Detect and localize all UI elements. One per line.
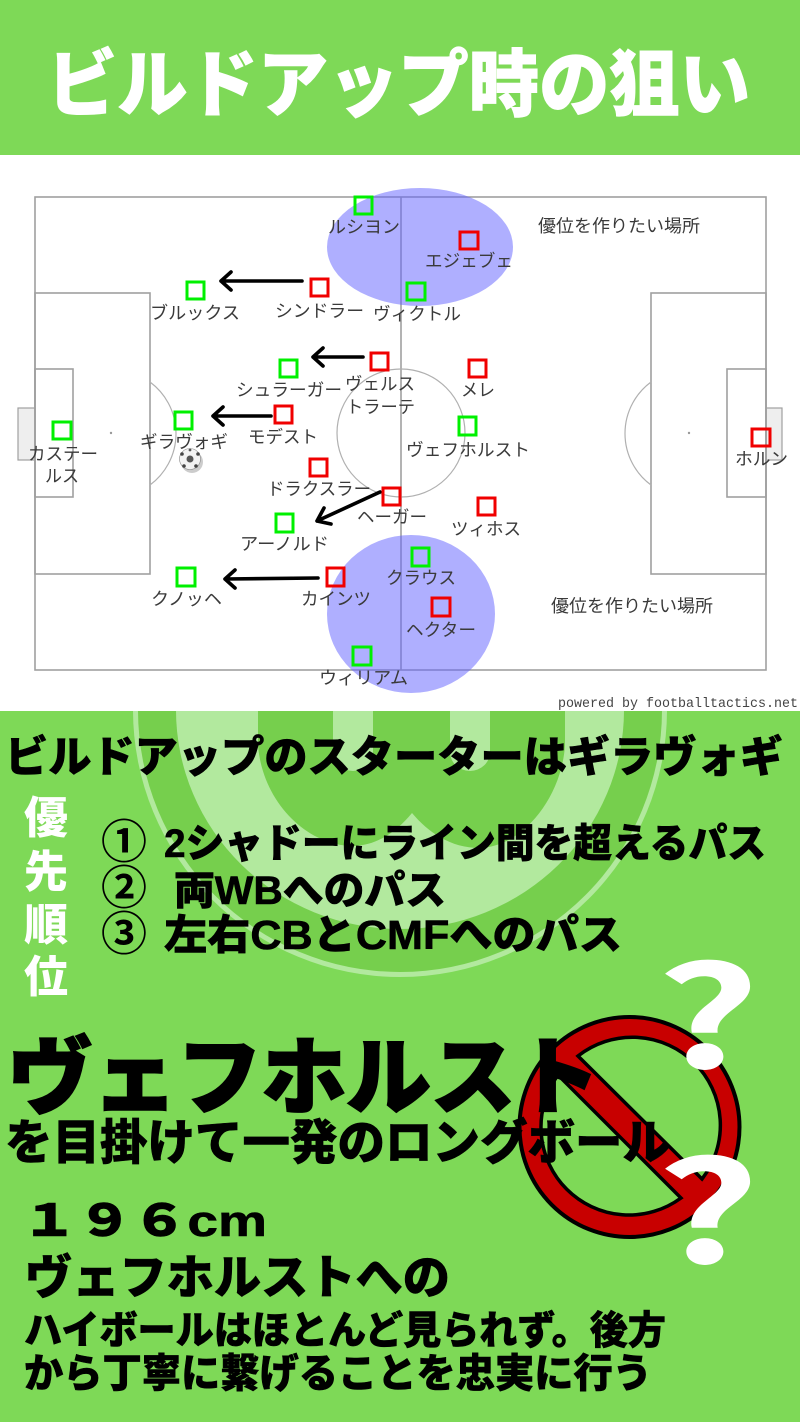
highlighted zone: top — [327, 188, 513, 306]
vertical label: priority: 先 — [24, 848, 68, 897]
arrow: シンドラー to ブルックス — [221, 272, 302, 290]
player: クラウス: クラウス — [386, 568, 456, 588]
priority list — [101, 816, 766, 960]
player: ヴェフホルスト — [406, 417, 530, 460]
player: ヴェルストラーテ: トラーテ — [346, 397, 415, 417]
player: エジェブェ: エジェブェ — [425, 251, 513, 271]
panel: lower section background — [0, 711, 800, 1422]
player: カステールス: ルス — [45, 466, 79, 486]
item 2: ② — [101, 862, 147, 914]
item 2 — [101, 862, 446, 914]
arrow: ヴェルストラーテ to シュラーガー — [313, 348, 363, 366]
question mark bottom: ? — [656, 1102, 760, 1304]
vertical label: priority: 順 — [24, 901, 68, 950]
player: ルシヨン: ルシヨン — [328, 217, 400, 237]
player: クノッヘ — [151, 568, 222, 609]
player: ツィホス: ツィホス — [451, 519, 521, 539]
player: アーノルド: アーノルド — [240, 534, 329, 554]
arrow: ヘーガー to アーノルド — [317, 492, 380, 524]
player: シンドラー: シンドラー — [275, 301, 364, 321]
highlighted zone: bottom — [327, 535, 495, 693]
player: ホルン: ホルン — [735, 449, 788, 469]
player: ホルン — [735, 429, 788, 469]
player: ツィホス — [451, 498, 521, 539]
item 1: 2シャドーにライン間を超えるパス — [164, 822, 766, 866]
player: ヘーガー: ヘーガー — [357, 507, 427, 527]
player: ヴェルストラーテ: ヴェルス — [345, 374, 415, 394]
title: ビルドアップ時の狙い — [47, 45, 750, 126]
vertical label: priority: 優 — [24, 794, 68, 843]
player: ブルックス — [150, 282, 240, 323]
item 3: 左右CBとCMFへのパス — [164, 912, 622, 958]
player: ヘクター — [406, 598, 476, 640]
player: シュラーガー — [236, 360, 342, 400]
player: ヘクター: ヘクター — [406, 620, 476, 640]
panel: tactical pitch diagram — [0, 155, 800, 712]
player: ドラクスラー — [267, 459, 371, 499]
pitch markings — [18, 197, 782, 670]
player: ウィリアム: ウィリアム — [319, 668, 408, 688]
player: クノッヘ: クノッヘ — [151, 589, 222, 609]
body line 1: ヴェフホルストへの — [25, 1251, 450, 1304]
vertical label: priority: 位 — [24, 953, 68, 1002]
player: アーノルド — [240, 514, 329, 554]
player: ギラヴォギ — [140, 412, 228, 452]
item 2: 両WBへのパス — [174, 869, 446, 913]
body line 3: から丁寧に繋げることを忠実に行う — [24, 1352, 652, 1396]
item 1: ① — [101, 816, 147, 868]
heading: ヴェフホルスト: ヴェフホルスト — [8, 1031, 600, 1125]
player: ヴィクトル — [373, 283, 461, 324]
player: カステールス — [28, 422, 98, 486]
player: メレ — [461, 360, 495, 400]
player: ヴィクトル: ヴィクトル — [373, 304, 461, 324]
zone label top: 優位を作りたい場所 — [538, 216, 700, 236]
player: メレ: メレ — [461, 380, 495, 400]
icon: prohibition sign — [520, 1017, 740, 1237]
player: ブルックス: ブルックス — [150, 303, 240, 323]
player: ヴェルストラーテ — [345, 353, 415, 417]
arrow: モデスト to ギラヴォギ — [213, 407, 271, 425]
player: カインツ: カインツ — [301, 589, 371, 609]
item 3: ③ — [101, 908, 147, 960]
player: ヘーガー — [357, 488, 427, 527]
icon: soccer ball — [180, 448, 203, 473]
player: ルシヨン — [328, 197, 400, 237]
player: クラウス — [386, 548, 456, 588]
height stat: １９６cm — [22, 1197, 267, 1246]
player: シュラーガー: シュラーガー — [236, 380, 342, 400]
player: カステールス: カステー — [28, 444, 98, 464]
subheading: long ball: を目掛けて一発のロングボール — [5, 1116, 670, 1170]
zone label bottom: 優位を作りたい場所 — [551, 596, 713, 616]
player: シンドラー — [275, 279, 364, 321]
player: カインツ — [301, 568, 371, 609]
player: モデスト: モデスト — [248, 427, 318, 447]
player: ウィリアム — [319, 647, 408, 688]
player: エジェブェ — [425, 232, 513, 271]
heading: build-up starter: ビルドアップのスターターはギラヴォギ — [5, 733, 783, 782]
vertical label: priority — [24, 794, 68, 1002]
arrow: カインツ to クノッヘ — [225, 570, 318, 588]
icon: club crest watermark — [133, 711, 667, 977]
player: ドラクスラー: ドラクスラー — [267, 479, 371, 499]
player: ヴェフホルスト: ヴェフホルスト — [406, 440, 530, 460]
player: モデスト — [248, 406, 318, 447]
player: ギラヴォギ: ギラヴォギ — [140, 432, 228, 452]
body line 2: ハイボールはほとんど見られず。後方 — [24, 1310, 666, 1353]
question mark top: ? — [656, 907, 760, 1109]
header band — [0, 0, 800, 155]
